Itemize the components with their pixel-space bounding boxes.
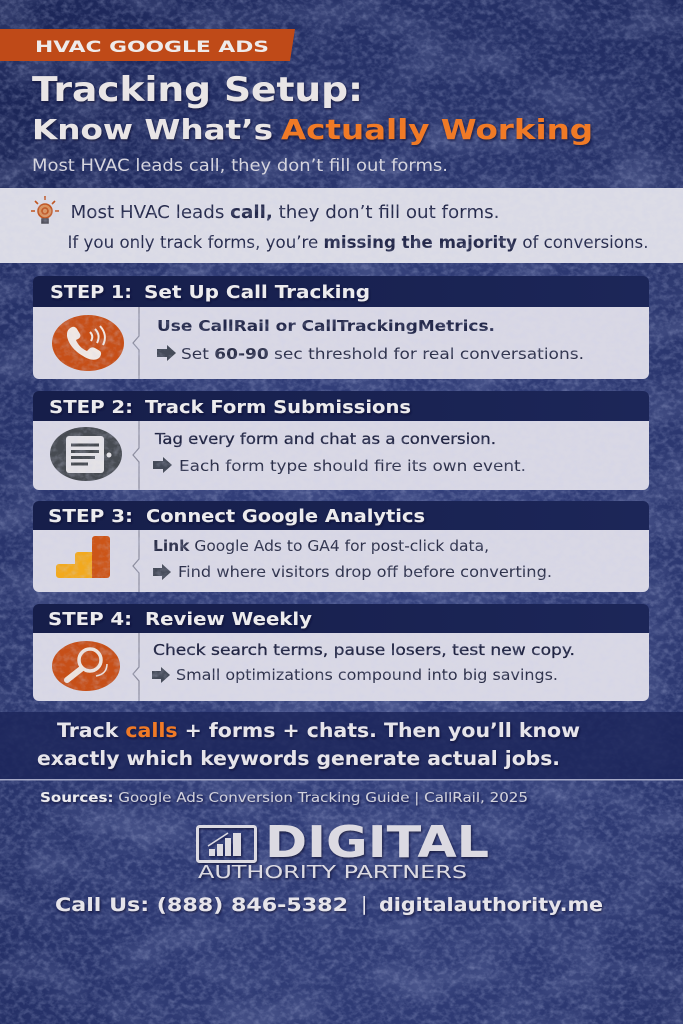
step 2 detail text: Each form type should fire its own event. bbox=[179, 457, 526, 475]
step 4 title: Review Weekly bbox=[145, 609, 312, 630]
step 1 detail text: Set 60-90 sec threshold for real conversations. bbox=[181, 345, 584, 363]
step 1 main text: Use CallRail or CallTrackingMetrics. bbox=[157, 317, 495, 335]
step 2 main text: Tag every form and chat as a conversion. bbox=[154, 430, 496, 448]
step 4 main text: Check search terms, pause losers, test new copy. bbox=[153, 641, 575, 659]
paper texture overlay bbox=[36, 196, 647, 701]
step 3 main text: Link Google Ads to GA4 for post-click data, bbox=[153, 537, 489, 555]
panel: step 4 bbox=[33, 604, 649, 701]
separator: | bbox=[361, 893, 367, 915]
step 4 header bbox=[33, 604, 649, 633]
step 3 divider bbox=[133, 530, 139, 592]
panel: step 3 bbox=[33, 501, 649, 592]
step 2 body bbox=[33, 414, 649, 490]
takeaway line 2: exactly which keywords generate actual jobs. bbox=[37, 747, 560, 770]
step 4 divider bbox=[133, 633, 139, 701]
step 2 heading: STEP 2: bbox=[49, 398, 133, 418]
callout band bbox=[0, 188, 683, 263]
icon: phone bbox=[52, 315, 124, 371]
panel: step 2 bbox=[33, 391, 649, 490]
icon: magnifier bbox=[52, 641, 120, 691]
subtitle: Most HVAC leads call, they don’t fill out forms. bbox=[32, 156, 448, 175]
step 2 title: Track Form Submissions bbox=[145, 397, 411, 418]
title line 1: Tracking Setup: bbox=[32, 70, 363, 110]
step 1 title: Set Up Call Tracking bbox=[144, 282, 370, 303]
step 1 header bbox=[33, 276, 649, 307]
icon: form bbox=[50, 427, 122, 481]
callout line 1: Most HVAC leads call, they don’t fill out forms. bbox=[70, 202, 500, 223]
icon: analytics bars bbox=[56, 536, 110, 578]
category banner bbox=[0, 29, 295, 61]
contact line bbox=[55, 893, 603, 916]
panel: step 1 bbox=[33, 276, 649, 379]
title line 2: Know What’s bbox=[32, 113, 273, 146]
icon: arrow bbox=[153, 457, 172, 473]
title highlight: Actually Working bbox=[281, 113, 593, 146]
logo tagline: AUTHORITY PARTNERS bbox=[198, 863, 467, 883]
step 1 heading: STEP 1: bbox=[50, 283, 132, 303]
step 4 body bbox=[33, 627, 649, 701]
callout line 2: If you only track forms, you’re missing the majority of conversions. bbox=[68, 233, 648, 253]
step 3 header bbox=[33, 501, 649, 530]
takeaway band bbox=[0, 712, 683, 780]
icon: arrow bbox=[152, 667, 170, 683]
logo wordmark: DIGITAL bbox=[265, 817, 489, 868]
website: digitalauthority.me bbox=[379, 894, 603, 916]
step 3 body bbox=[33, 524, 649, 592]
step 4 detail text: Small optimizations compound into big savings. bbox=[176, 666, 558, 684]
title bbox=[32, 70, 593, 146]
sources: Sources: Google Ads Conversion Tracking Guide | CallRail, 2025 bbox=[40, 790, 528, 806]
step 4 heading: STEP 4: bbox=[48, 610, 132, 630]
step 1 divider bbox=[133, 307, 139, 379]
icon: arrow bbox=[157, 345, 176, 361]
logo bbox=[198, 817, 489, 883]
phone number: Call Us: (888) 846-5382 bbox=[55, 894, 348, 916]
step 2 divider bbox=[133, 421, 139, 490]
icon: light bulb bbox=[31, 196, 59, 223]
step 2 header bbox=[33, 391, 649, 421]
step 3 title: Connect Google Analytics bbox=[146, 506, 425, 527]
logo mark bbox=[198, 826, 256, 862]
step 1 body bbox=[33, 300, 649, 379]
category banner: HVAC GOOGLE ADS bbox=[35, 37, 269, 56]
step 3 heading: STEP 3: bbox=[48, 507, 133, 527]
takeaway line 1: Track calls + forms + chats. Then you’ll know bbox=[57, 719, 580, 742]
icon: arrow bbox=[153, 564, 171, 580]
step 3 detail text: Find where visitors drop off before converting. bbox=[178, 563, 552, 581]
